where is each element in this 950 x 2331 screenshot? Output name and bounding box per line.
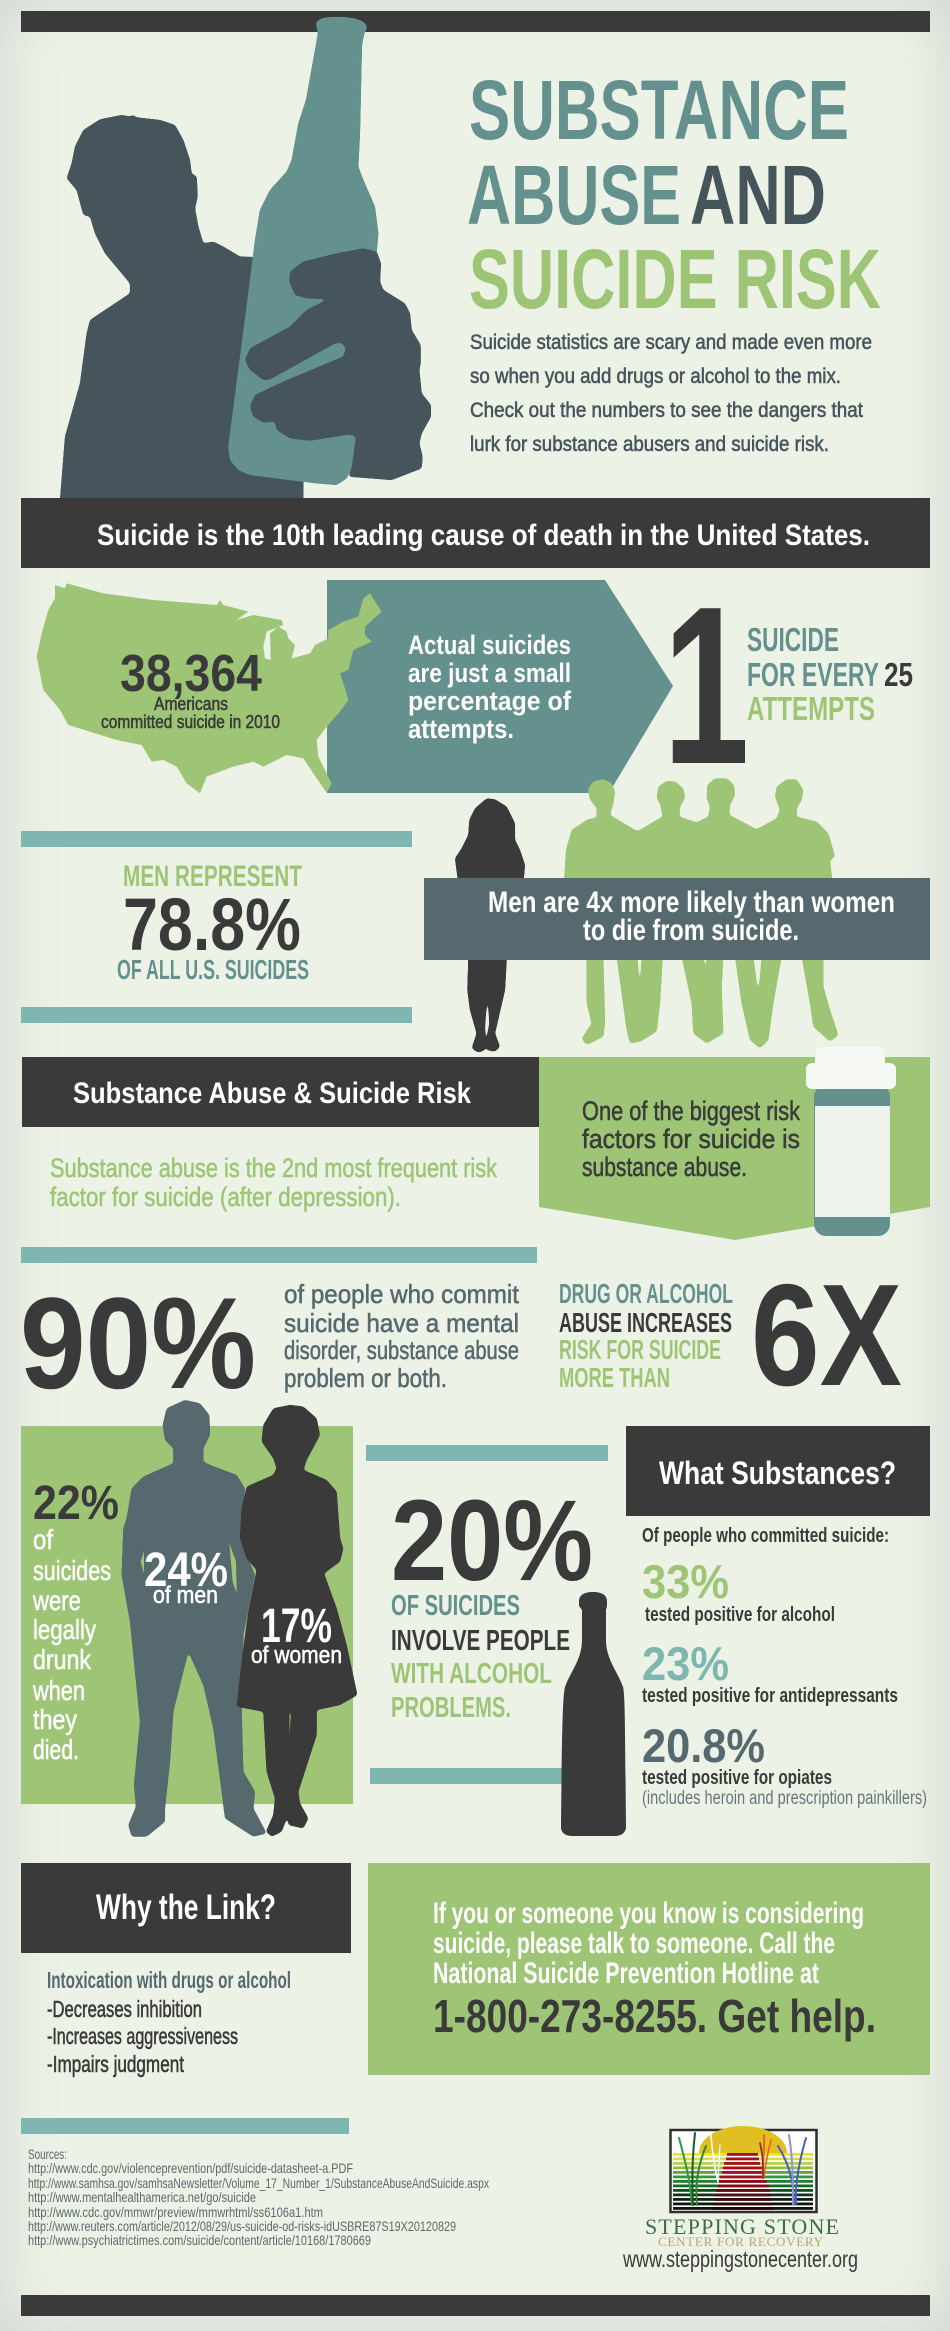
text: of suicides were legally drunk: suicides	[33, 1555, 111, 1586]
text: mental disorder: problem or both.	[284, 1363, 447, 1393]
panel: biggest risk factors	[539, 1057, 930, 1240]
stat: 24% of men: of men	[153, 1582, 218, 1609]
caption: committed suicide in 2010	[101, 712, 280, 732]
intro paragraph: Suicide statistics are scary and made even more	[470, 331, 872, 354]
silhouettes: four men	[564, 778, 838, 1048]
sources: Sources:	[28, 2146, 67, 2162]
stat block: 20% of suicides: 20%	[391, 1477, 593, 1605]
arrow panel: actual suicides: percentage of	[408, 686, 572, 716]
text: intoxication effects: -Impairs judgment	[47, 2051, 184, 2077]
stat: 6X: 6X	[751, 1254, 902, 1416]
logo tagline: CENTER FOR RECOVERY	[658, 2234, 824, 2249]
stat: 1 suicide for every 25 attempts: 25	[884, 656, 913, 693]
banner: 10th leading cause	[21, 498, 930, 568]
title: AND	[690, 148, 826, 242]
heading: substance abuse and suicide risk: Substance Abuse & Suicide Risk	[73, 1077, 471, 1110]
text: intoxication effects: Intoxication with drugs or alcohol	[47, 1967, 291, 1993]
stat block: men represent: MEN REPRESENT	[123, 860, 302, 893]
text: of suicides were legally drunk: drunk	[33, 1644, 92, 1675]
panel: biggest risk factors: factors for suicide is	[582, 1124, 800, 1154]
panel: biggest risk factors: substance abuse.	[582, 1152, 747, 1182]
man silhouette	[59, 115, 303, 510]
stat: 17% of women: 17%	[261, 1600, 332, 1653]
green text: 2nd most frequent: Substance abuse is the 2nd most frequent risk	[50, 1153, 497, 1183]
stat block: men represent	[21, 831, 412, 1023]
item: opiates: 20.8%	[642, 1719, 765, 1772]
title: ABUSE	[467, 148, 681, 242]
green text: 2nd most frequent: factor for suicide (after depression).	[50, 1182, 401, 1212]
stat: 24% of men: 24%	[144, 1544, 228, 1597]
sources	[28, 2146, 489, 2248]
sources: http://www.reuters.com/article/2012/08/29/us-suicide-od-risks-idUSBRE87S19X20120829	[28, 2218, 456, 2234]
sources: http://www.psychiatrictimes.com/suicide/content/article/10168/1780669	[28, 2232, 371, 2248]
text: of suicides were legally drunk	[32, 1524, 111, 1765]
item: antidepressants: 23%	[642, 1637, 729, 1690]
sources: http://www.cdc.gov/mmwr/preview/mmwrhtml/ss6106a1.htm	[28, 2204, 323, 2220]
stat block: men represent: OF ALL U.S. SUICIDES	[117, 954, 309, 985]
panel: legally drunk	[21, 1400, 357, 1837]
caption: Americans	[154, 694, 228, 714]
stat block: 20% of suicides: OF SUICIDES	[391, 1590, 520, 1622]
stat: 1 suicide for every 25 attempts: ATTEMPTS	[747, 690, 875, 727]
green text: 2nd most frequent	[50, 1153, 497, 1212]
text: mental disorder: suicide have a mental	[284, 1308, 519, 1338]
stat: 1 suicide for every 25 attempts: SUICIDE	[747, 621, 839, 658]
arrow panel: actual suicides: attempts.	[408, 714, 514, 744]
item: antidepressants	[642, 1637, 898, 1707]
divider bar	[21, 2118, 349, 2134]
sources: http://www.samhsa.gov/samhsaNewsletter/Volume_17_Number_1/SubstanceAbuseAndSuicide.aspx	[28, 2175, 489, 2191]
illustration: man holding bottle	[59, 17, 431, 510]
text: intoxication effects	[47, 1967, 291, 2077]
divider bar	[21, 1247, 537, 1263]
bottom bar	[21, 2295, 930, 2316]
text: drug or alcohol abuse increases risk: ABUSE INCREASES	[559, 1307, 732, 1338]
heading: substance abuse and suicide risk	[22, 1057, 539, 1127]
text: of suicides were legally drunk: when	[32, 1675, 85, 1706]
icon: dark bottle	[561, 1592, 626, 1836]
US map with stat	[37, 583, 382, 793]
heading: why the link: Why the Link?	[96, 1888, 276, 1927]
stat block: men represent: 78.8%	[123, 883, 301, 966]
intro paragraph: so when you add drugs or alcohol to the mix.	[470, 365, 841, 388]
panel: hotline	[368, 1863, 930, 2075]
text: of suicides were legally drunk: were	[32, 1585, 81, 1616]
text: of suicides were legally drunk: died.	[33, 1734, 79, 1765]
arrow panel: actual suicides	[327, 580, 673, 793]
text: of suicides were legally drunk: of	[33, 1524, 53, 1555]
text: intoxication effects: -Increases aggressiveness	[47, 2023, 238, 2049]
panel: men are 4x more likely	[424, 878, 930, 960]
heading: why the link	[21, 1863, 351, 1953]
logo name: STEPPING STONE	[645, 2214, 839, 2239]
stat: 17% of women	[251, 1600, 342, 1669]
stat block: 20% of suicides: PROBLEMS.	[391, 1692, 511, 1724]
stat: 90%: 90%	[20, 1270, 256, 1416]
list: substances	[642, 1525, 927, 1809]
text: drug or alcohol abuse increases risk: DRUG OR ALCOHOL	[559, 1278, 733, 1309]
text: mental disorder: disorder, substance abuse	[284, 1335, 519, 1365]
item: opiates	[642, 1719, 927, 1809]
text: drug or alcohol abuse increases risk: RISK FOR SUICIDE	[559, 1334, 721, 1365]
item: alcohol	[642, 1555, 835, 1626]
panel: men are 4x more likely: to die from suicide.	[583, 914, 799, 947]
panel: biggest risk factors: One of the biggest risk	[582, 1096, 800, 1126]
item: opiates: tested positive for opiates	[642, 1767, 832, 1789]
intro paragraph	[470, 331, 872, 456]
text: drug or alcohol abuse increases risk	[559, 1278, 733, 1393]
bottle	[228, 17, 378, 485]
icon: pill bottle	[806, 1047, 896, 1236]
text: mental disorder: of people who commit	[284, 1279, 520, 1309]
sources: http://www.mentalhealthamerica.net/go/suicide	[28, 2189, 256, 2205]
stat: 17% of women: of women	[251, 1642, 342, 1669]
map of United States	[37, 583, 382, 793]
item: alcohol: tested positive for alcohol	[645, 1604, 835, 1626]
stat: 38,364: 38,364	[120, 645, 262, 703]
silhouette: man	[122, 1400, 267, 1837]
text: drug or alcohol abuse increases risk: MORE THAN	[559, 1362, 670, 1393]
silhouette: woman	[455, 798, 525, 1053]
silhouette: woman	[237, 1405, 357, 1837]
intro paragraph: Check out the numbers to see the dangers that	[470, 399, 863, 422]
heading: what substances: What Substances?	[659, 1455, 896, 1491]
item: alcohol: 33%	[642, 1555, 729, 1608]
top bar	[21, 11, 930, 32]
text: of suicides were legally drunk: they	[33, 1704, 77, 1735]
heading: what substances	[626, 1426, 930, 1516]
hand gripping bottle	[245, 248, 431, 480]
stat: 22%: 22%	[33, 1477, 119, 1530]
website: www.steppingstonecenter.org	[622, 2246, 858, 2272]
caption	[101, 694, 280, 732]
arrow panel: actual suicides: are just a small	[408, 658, 571, 688]
intro paragraph: lurk for substance abusers and suicide risk.	[470, 433, 829, 456]
stat: 1 suicide for every 25 attempts	[663, 559, 913, 811]
big numeral 1: 1	[663, 559, 749, 811]
text: mental disorder	[284, 1279, 520, 1393]
logo mark	[670, 2126, 816, 2212]
sources: http://www.cdc.gov/violenceprevention/pdf/suicide-datasheet-a.PDF	[28, 2160, 353, 2176]
stat: 1 suicide for every 25 attempts: FOR EVERY	[747, 656, 879, 693]
arrow panel: actual suicides: Actual suicides	[408, 630, 571, 660]
stat block: 20% of suicides: INVOLVE PEOPLE	[391, 1625, 570, 1657]
stat block: 20% of suicides: WITH ALCOHOL	[391, 1658, 552, 1690]
text: of suicides were legally drunk: legally	[33, 1614, 96, 1645]
stat block: 20% of suicides	[366, 1445, 608, 1784]
text: intoxication effects: -Decreases inhibition	[47, 1996, 202, 2022]
title	[467, 63, 881, 326]
logo: Stepping Stone	[622, 2126, 858, 2272]
gaps at the man's arms	[141, 1543, 237, 1593]
